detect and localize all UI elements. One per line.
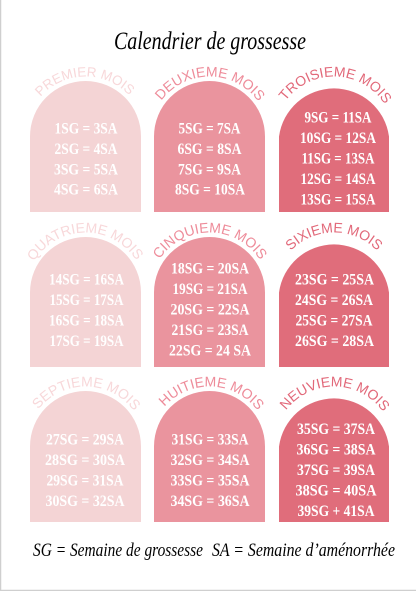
panel: huitieme mois [154,376,265,522]
panel: septieme mois: 30SG = 32SA [46,493,125,510]
panel: septieme mois [30,376,141,522]
legend: SG = Semaine de grossesse [33,540,203,561]
panel: cinquieme mois [154,222,266,367]
panel: sixieme mois: 25SG = 27SA [296,312,373,330]
panel: deuxieme mois: 8SG = 10SA [175,182,246,198]
panel: septieme mois: SEPTIEME MOIS [32,376,140,410]
panel: cinquieme mois: 20SG = 22SA [170,302,250,318]
legend [33,540,395,561]
panel: cinquieme mois: CINQUIEME MOIS [154,222,266,258]
panel: neuvieme mois: 37SG = 39SA [297,462,376,479]
panel: troisieme mois: 11SG = 13SA [302,150,375,168]
panel: premier mois: 1SG = 3SA [54,120,118,138]
panel: cinquieme mois: 18SG = 20SA [171,260,250,278]
panel: premier mois: 3SG = 5SA [54,162,119,178]
panel: sixieme mois: 26SG = 28SA [295,333,375,350]
panel: sixieme mois [279,222,389,367]
panel: deuxieme mois: 7SG = 9SA [178,162,242,178]
panel: troisieme mois: 12SG = 14SA [300,171,376,188]
panel: huitieme mois: HUITIEME MOIS [158,376,264,409]
panel: huitieme mois: 34SG = 36SA [170,493,250,510]
panel: cinquieme mois: 19SG = 21SA [172,281,248,298]
title: Calendrier de grossesse [114,28,306,55]
panel: neuvieme mois: 39SG + 41SA [298,503,375,520]
panel: sixieme mois: 24SG = 26SA [295,292,374,309]
panel: troisieme mois: 13SG = 15SA [300,192,376,208]
panel: cinquieme mois: 21SG = 23SA [172,322,249,339]
panel: troisieme mois: 9SG = 11SA [304,110,372,126]
panel: troisieme mois: TROISIEME MOIS [278,66,391,103]
panel: deuxieme mois: 6SG = 8SA [178,141,242,158]
panel: deuxieme mois: 5SG = 7SA [178,120,241,138]
panel: septieme mois: 27SG = 29SA [46,432,125,448]
panel: premier mois [30,67,141,212]
panel: quatrieme mois: 15SG = 17SA [50,292,124,309]
panel: troisieme mois: 10SG = 12SA [300,130,377,147]
panel: huitieme mois: 33SG = 35SA [170,472,250,490]
panel: sixieme mois: 23SG = 25SA [295,272,375,288]
panel: huitieme mois: 31SG = 33SA [172,432,249,448]
panel: deuxieme mois: DEUXIEME MOIS [154,66,264,100]
panel: premier mois: PREMIER MOIS [34,67,134,96]
panel: quatrieme mois [28,222,143,367]
panel: troisieme mois [278,66,391,212]
panel: quatrieme mois: 14SG = 16SA [49,272,125,288]
panel: quatrieme mois: QUATRIEME MOIS [28,222,143,260]
panel: neuvieme mois: 35SG = 37SA [297,421,376,438]
panel: quatrieme mois: 17SG = 19SA [50,333,124,350]
panel: neuvieme mois: NEUVIEME MOIS [280,376,389,410]
panel: quatrieme mois: 16SG = 18SA [49,312,125,330]
panel: huitieme mois: 32SG = 34SA [170,452,250,469]
panel: septieme mois: 28SG = 30SA [45,452,126,469]
panel: cinquieme mois: 22SG = 24 SA [169,342,252,360]
panel: premier mois: 4SG = 6SA [54,182,119,198]
panel: neuvieme mois: 38SG = 40SA [296,482,377,500]
panel: neuvieme mois: 36SG = 38SA [296,442,376,458]
panel: sixieme mois: SIXIEME MOIS [286,222,382,250]
panel: premier mois: 2SG = 4SA [54,141,118,158]
panel: deuxieme mois [154,66,265,212]
panel: septieme mois: 29SG = 31SA [46,472,124,490]
panel: neuvieme mois [279,376,389,522]
